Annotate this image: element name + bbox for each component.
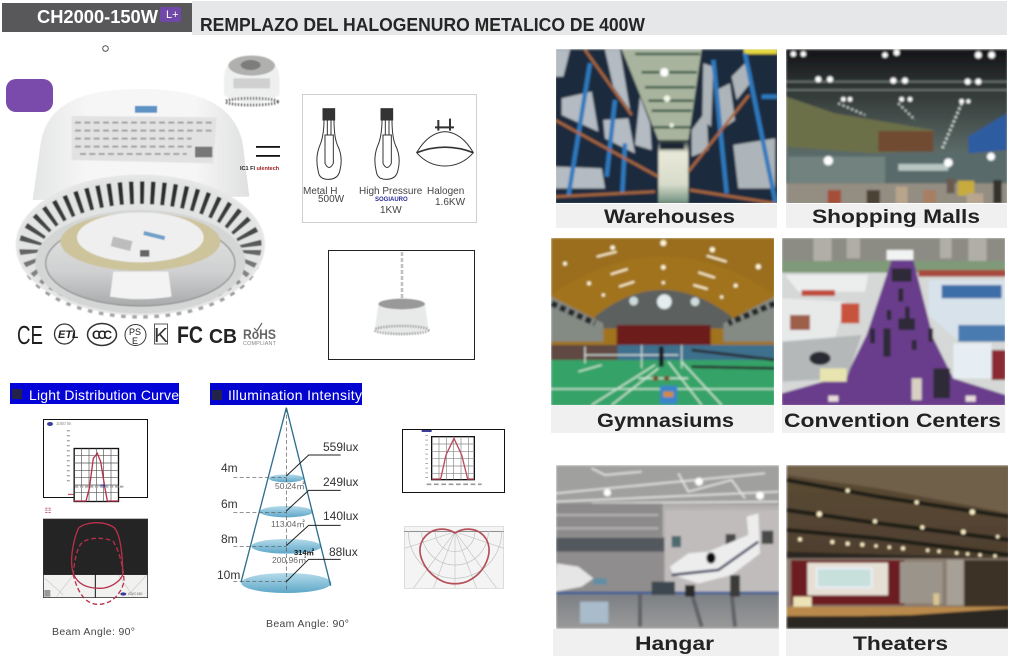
lamp labels: 1KW bbox=[380, 205, 402, 216]
cone labels: 6m bbox=[221, 497, 238, 511]
cone discs bbox=[241, 474, 331, 593]
lamp labels: 1.6KW bbox=[435, 197, 466, 208]
logo: PSE bbox=[125, 324, 146, 346]
caption bar bbox=[553, 629, 779, 656]
icon: metal halide bulb bbox=[317, 109, 341, 179]
page title: REMPLAZO DEL HALOGENURO METALICO DE 400W bbox=[200, 14, 646, 35]
certification logos bbox=[17, 320, 277, 350]
logo: PSE: PS bbox=[129, 327, 141, 337]
badge: L+: L+ bbox=[166, 9, 179, 21]
panel: convention centers: Convention Centers bbox=[784, 411, 1001, 432]
logo: CCC bbox=[88, 324, 116, 346]
cone labels: 559lux bbox=[323, 440, 358, 454]
caption bar bbox=[786, 629, 1008, 656]
panel: warehouses: Warehouses bbox=[604, 207, 735, 228]
logo: RoHS bbox=[243, 323, 277, 347]
chart: light distribution linear: ☷ bbox=[45, 506, 51, 515]
cone labels: 249lux bbox=[323, 475, 358, 489]
lamp labels: Halogen bbox=[427, 186, 464, 197]
model name: CH2000-150W bbox=[37, 6, 159, 27]
caption bar bbox=[556, 204, 777, 228]
logo: RoHS: RoHS bbox=[243, 326, 276, 342]
chart: light distribution polar bbox=[43, 519, 148, 604]
lens and reflector bbox=[35, 210, 245, 313]
panel: warehouses bbox=[555, 49, 778, 228]
panel: gymnasiums: Gymnasiums bbox=[597, 411, 734, 432]
chart: small linear curve bbox=[402, 429, 504, 492]
logo: FC: FC bbox=[177, 322, 203, 349]
icon: high pressure bulb bbox=[375, 109, 399, 179]
panel: hangar: Hangar bbox=[635, 634, 715, 655]
panel: theaters: Theaters bbox=[853, 634, 948, 655]
panel: convention centers bbox=[782, 238, 1006, 433]
panel: hanging lamp bbox=[328, 250, 474, 360]
panel: gymnasiums bbox=[551, 238, 775, 433]
product label bbox=[72, 106, 217, 163]
main luminaire product image bbox=[17, 89, 264, 314]
cone labels: 113.04㎡ bbox=[271, 519, 305, 529]
heading: Illumination Intensity: Illumination Intensity bbox=[228, 387, 362, 403]
lamp labels: High Pressure bbox=[359, 186, 423, 197]
chart: polar curve bbox=[404, 527, 504, 588]
logo: ETL bbox=[54, 324, 79, 344]
heading: Illumination Intensity bbox=[210, 383, 362, 405]
panel: theaters bbox=[786, 465, 1009, 656]
chart: light distribution linear bbox=[43, 419, 147, 515]
logo: CE: CE bbox=[17, 320, 43, 350]
cone labels bbox=[217, 440, 358, 582]
heading: Light Distribution Curve bbox=[10, 383, 179, 404]
chart: light distribution linear: 1000 lm bbox=[56, 421, 72, 426]
caption: beam angle left: Beam Angle: 90° bbox=[52, 626, 135, 638]
cone labels: 4m bbox=[221, 461, 238, 475]
purple label block bbox=[6, 79, 53, 112]
chart: illumination cone bbox=[233, 408, 341, 593]
panel: hangar bbox=[553, 465, 779, 656]
panel: shopping malls bbox=[786, 49, 1008, 228]
logo: CCC: CCC bbox=[92, 328, 112, 342]
caption bar bbox=[786, 204, 1007, 228]
caption bar bbox=[782, 405, 1005, 433]
header bar bbox=[2, 1, 1007, 35]
cone labels: 200.96㎡ bbox=[272, 555, 307, 565]
heading: Light Distribution Curve: Light Distribution Curve bbox=[29, 387, 179, 403]
lamp labels: Metal H bbox=[303, 186, 337, 197]
caption: beam angle center: Beam Angle: 90° bbox=[266, 618, 349, 630]
cone labels: 50.24㎡ bbox=[275, 481, 305, 491]
lamp labels bbox=[303, 186, 466, 216]
chart: light distribution polar: C0/C180 bbox=[128, 592, 142, 596]
equals sign bbox=[240, 146, 280, 172]
cone labels: 140lux bbox=[323, 509, 358, 523]
lamp labels: 500W bbox=[318, 194, 345, 205]
lamp labels: SOGIAURO bbox=[375, 197, 408, 203]
cone labels: 8m bbox=[221, 532, 238, 546]
badge: L+ bbox=[160, 7, 181, 22]
cone labels: 10m bbox=[217, 568, 240, 582]
panel: shopping malls: Shopping Malls bbox=[812, 207, 980, 228]
equals sign: IC1 Fl ulentech bbox=[240, 166, 280, 172]
logo: ETL: ETL bbox=[58, 329, 79, 341]
caption bar bbox=[551, 405, 774, 433]
cooling fin ring bbox=[17, 176, 264, 314]
logo: PSE: E bbox=[132, 336, 138, 346]
small top view lamp bbox=[224, 55, 279, 105]
logo: RoHS: COMPLIANT bbox=[243, 341, 277, 347]
small ring marker bbox=[103, 46, 108, 51]
logo: CB: CB bbox=[209, 326, 237, 348]
panel: equivalent lamps bbox=[302, 94, 476, 222]
logo: KC: K bbox=[154, 325, 169, 347]
cone labels: 314㎡ bbox=[294, 548, 315, 557]
cone labels: 88lux bbox=[329, 545, 358, 559]
icon: halogen lamp bbox=[417, 119, 473, 166]
